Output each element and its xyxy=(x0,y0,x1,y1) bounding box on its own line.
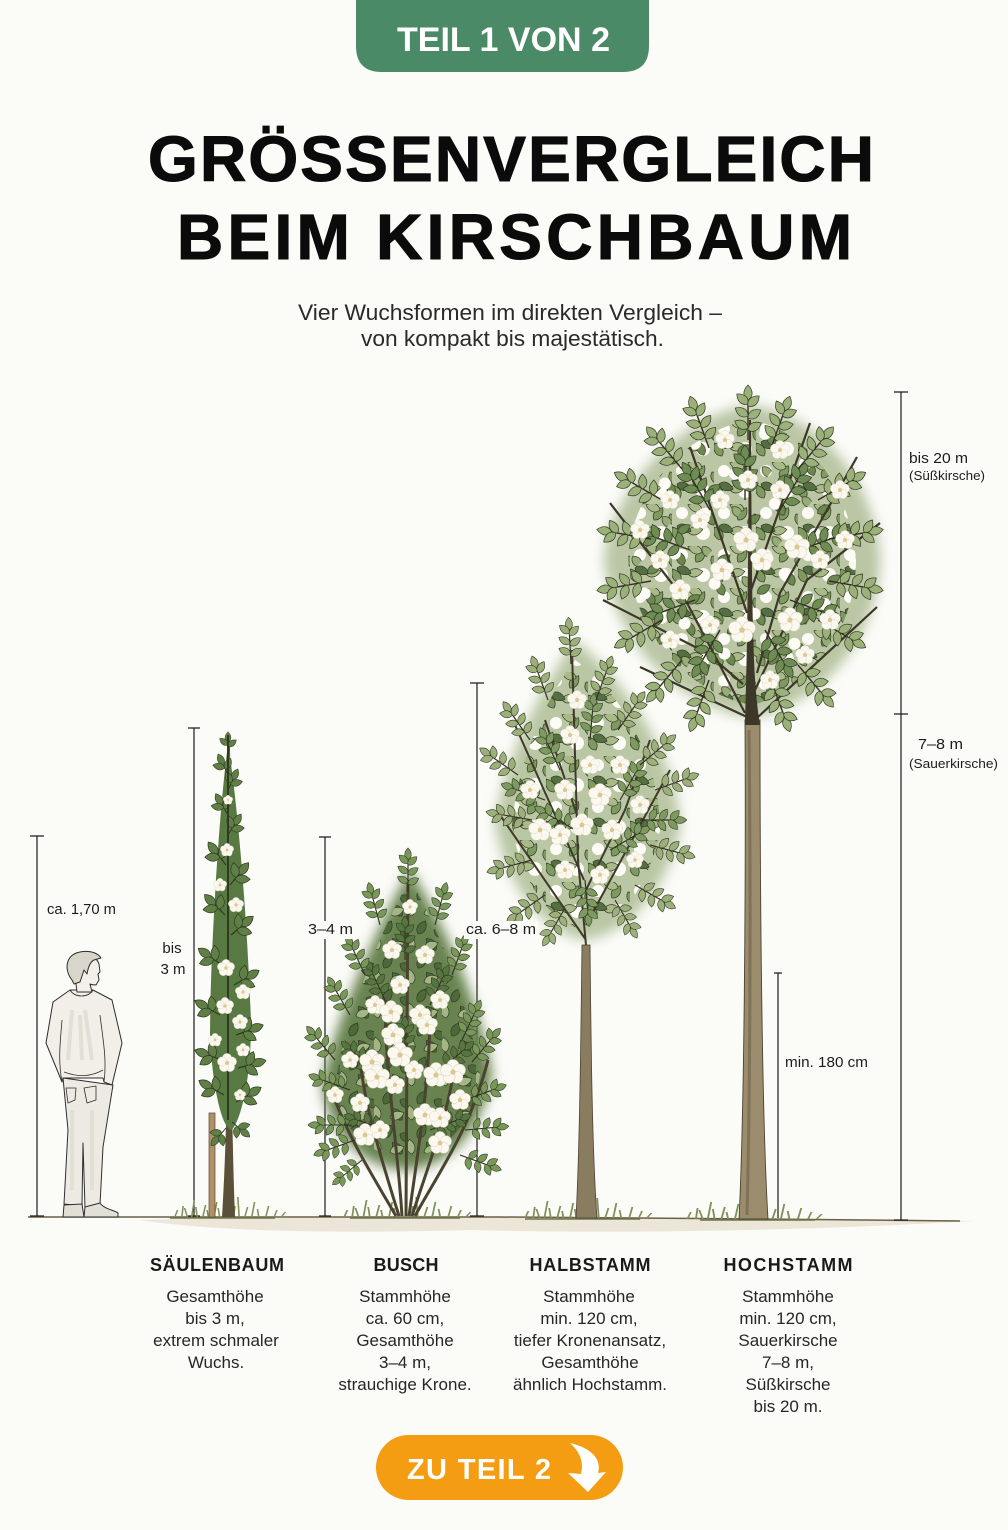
inner sprigs xyxy=(633,445,857,685)
foliage texture, second layer xyxy=(628,420,856,705)
tree: Halbstamm xyxy=(472,617,703,1218)
caption: Halbstamm: min. 120 cm, xyxy=(540,1309,638,1328)
dimension: Hochstamm trunk height: min. 180 cm xyxy=(785,1055,868,1071)
tree: Busch xyxy=(297,848,511,1217)
stems xyxy=(335,880,488,1216)
caption: Halbstamm: Stammhöhe xyxy=(543,1287,635,1306)
button: Zu Teil 2: ZU TEIL 2 xyxy=(407,1454,551,1486)
label: 7–8 m xyxy=(909,736,998,771)
foliage base xyxy=(604,405,880,718)
title xyxy=(148,123,874,273)
caption: Halbstamm: tiefer Kronenansatz, xyxy=(514,1331,666,1350)
foliage base xyxy=(210,745,251,1130)
foliage base xyxy=(495,640,680,940)
caption: Busch: BUSCH xyxy=(374,1255,438,1275)
caption: Busch: strauchige Krone. xyxy=(338,1375,472,1394)
caption: Busch: Stammhöhe xyxy=(359,1287,451,1306)
caption: Hochstamm: min. 120 cm, xyxy=(739,1309,837,1328)
grass xyxy=(687,1199,822,1219)
grass xyxy=(344,1197,471,1217)
caption: Hochstamm: 7–8 m, xyxy=(762,1353,814,1372)
caption: Busch: 3–4 m, xyxy=(379,1353,431,1372)
branches xyxy=(500,650,670,945)
person hair xyxy=(67,951,101,984)
label: ca. 6–8 m: ca. 6–8 m xyxy=(466,922,536,938)
dimension: person height: ca. 1,70 m xyxy=(47,902,116,918)
caption: Säulenbaum xyxy=(150,1255,284,1372)
leaves xyxy=(188,732,270,1153)
label: 3–4 m: 3–4 m xyxy=(308,922,353,938)
dimension: Säulenbaum height xyxy=(160,728,200,1216)
caption: Hochstamm: HOCHSTAMM xyxy=(724,1255,852,1275)
blossoms xyxy=(326,899,471,1153)
caption: Hochstamm: Sauerkirsche xyxy=(738,1331,838,1350)
caption: Halbstamm xyxy=(513,1255,667,1394)
subtitle: von kompakt bis majestätisch. xyxy=(361,326,664,351)
outer sprigs xyxy=(594,385,886,737)
dimension: Hochstamm trunk height xyxy=(774,973,868,1218)
caption: Hochstamm: Stammhöhe xyxy=(742,1287,834,1306)
tree: Hochstamm xyxy=(594,385,886,1219)
dimension: Säulenbaum height: 3 m xyxy=(160,961,186,978)
foliage texture xyxy=(512,660,660,930)
leader xyxy=(745,420,760,725)
label: 7–8 m: (Sauerkirsche) xyxy=(909,757,998,771)
trunk shading xyxy=(747,730,750,1215)
title: BEIM KIRSCHBAUM xyxy=(177,201,852,273)
grass xyxy=(525,1198,652,1218)
person shoes xyxy=(63,1203,118,1217)
icon: curved arrow xyxy=(568,1443,606,1492)
caption: Hochstamm: bis 20 m. xyxy=(754,1397,822,1416)
outer sprigs xyxy=(297,848,511,1193)
title: GRÖSSENVERGLEICH xyxy=(148,123,874,195)
inner sprigs xyxy=(497,692,687,928)
person shading xyxy=(68,1010,92,1190)
trunk xyxy=(576,945,597,1218)
tree: Säulenbaum xyxy=(175,732,285,1217)
label: bis 20 m xyxy=(909,450,985,483)
caption: Busch xyxy=(338,1255,472,1394)
header badge xyxy=(356,0,649,72)
dimension: person height xyxy=(30,836,116,1216)
button: Zu Teil 2 xyxy=(376,1435,623,1500)
label: bis 20 m: bis 20 m xyxy=(909,450,968,467)
dimension: Säulenbaum height: bis xyxy=(162,940,182,957)
dimension bar: Halbstamm height xyxy=(470,683,484,1216)
caption: Säulenbaum: bis 3 m, xyxy=(185,1309,245,1328)
foliage texture xyxy=(335,880,480,1158)
foliage base xyxy=(322,870,492,1170)
person head xyxy=(76,955,100,992)
subtitle xyxy=(298,300,723,351)
foliage texture xyxy=(628,420,856,705)
blossoms xyxy=(630,430,855,689)
caption: Hochstamm xyxy=(724,1255,852,1416)
blossoms xyxy=(520,690,650,884)
caption: Busch: Gesamthöhe xyxy=(356,1331,454,1350)
caption: Halbstamm: ähnlich Hochstamm. xyxy=(513,1375,667,1394)
caption: Busch: ca. 60 cm, xyxy=(366,1309,444,1328)
caption: Säulenbaum: Wuchs. xyxy=(188,1353,244,1372)
ground line xyxy=(28,1217,975,1232)
caption: Halbstamm: Gesamthöhe xyxy=(541,1353,639,1372)
person legs xyxy=(63,1078,113,1208)
outer sprigs xyxy=(472,617,703,952)
grass xyxy=(175,1197,285,1217)
branches xyxy=(603,423,880,717)
stake xyxy=(209,1113,215,1217)
person sweater xyxy=(46,990,122,1085)
illustration: person xyxy=(46,951,122,1217)
caption: Hochstamm: Süßkirsche xyxy=(745,1375,831,1394)
label: 7–8 m: 7–8 m xyxy=(918,736,963,753)
trunk xyxy=(222,740,235,1217)
dimension bar: Busch height xyxy=(319,837,331,1216)
caption: Säulenbaum: extrem schmaler xyxy=(153,1331,279,1350)
trunk xyxy=(739,720,768,1219)
dimension: Süßkirsche and Sauerkirsche heights xyxy=(894,392,998,1220)
header badge: TEIL 1 VON 2 xyxy=(397,21,610,59)
caption: Säulenbaum: SÄULENBAUM xyxy=(150,1255,284,1275)
blossoms xyxy=(208,795,251,1100)
caption: Halbstamm: HALBSTAMM xyxy=(530,1255,650,1275)
label: bis 20 m: (Süßkirsche) xyxy=(909,469,985,483)
person sweater details xyxy=(60,990,105,1103)
inner sprigs xyxy=(333,916,482,1141)
subtitle: Vier Wuchsformen im direkten Vergleich – xyxy=(298,300,723,325)
caption: Säulenbaum: Gesamthöhe xyxy=(166,1287,264,1306)
